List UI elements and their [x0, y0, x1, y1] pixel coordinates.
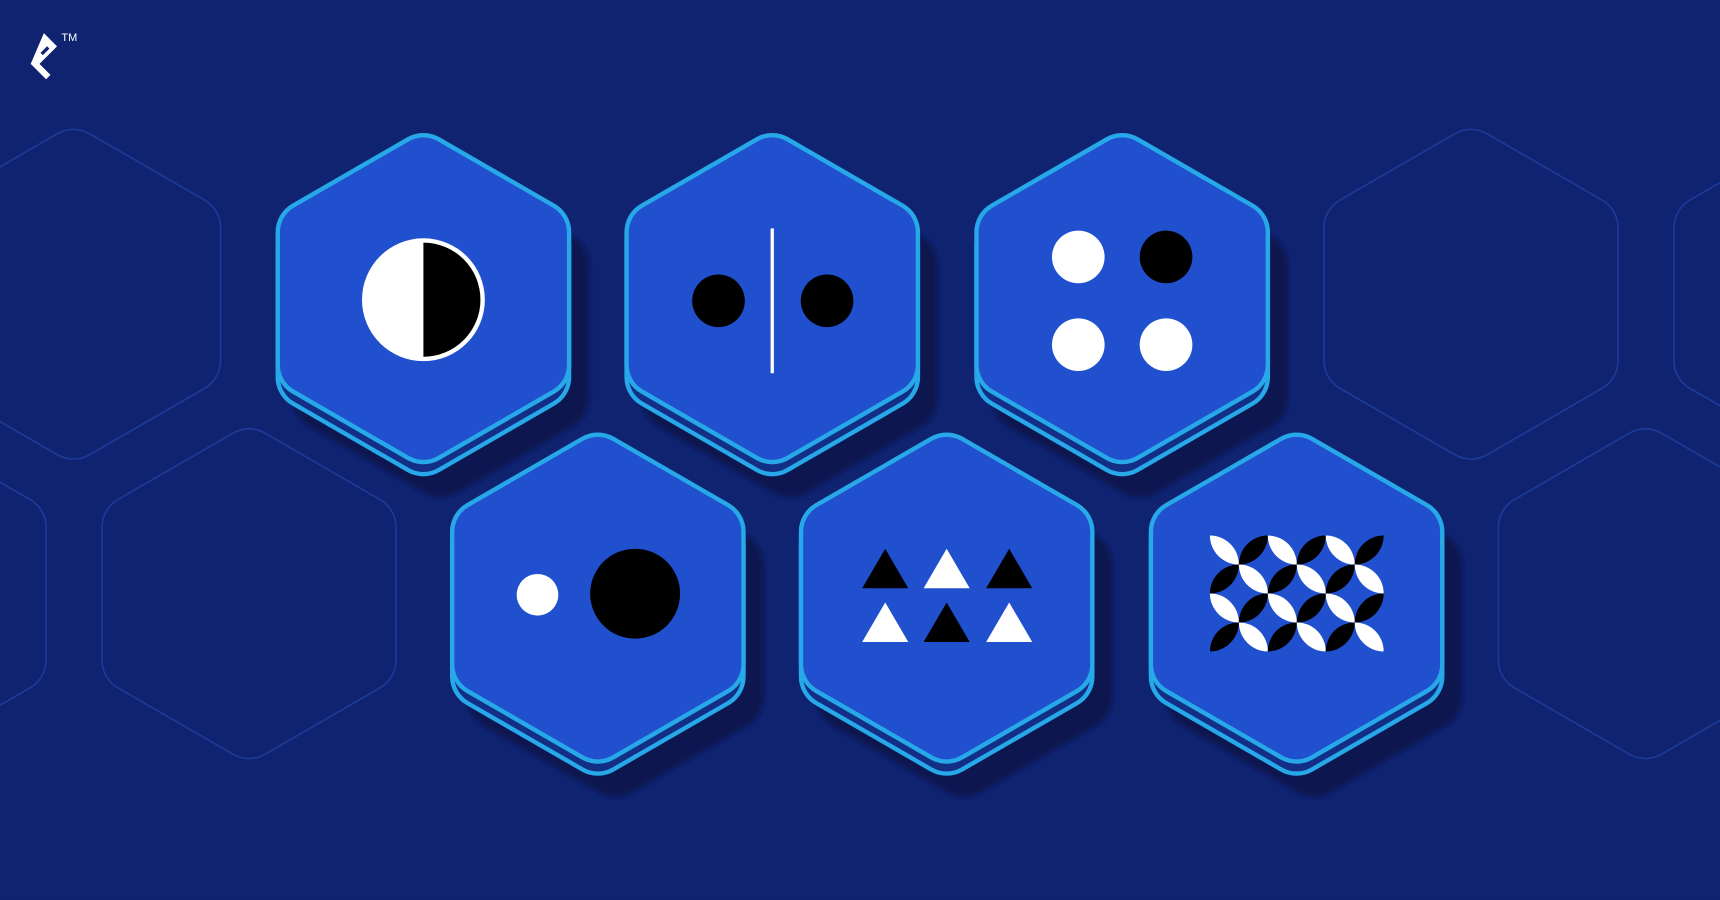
- hexagon tile: dots separated by line: [657, 166, 905, 464]
- icon: two dots and divider: [692, 228, 853, 373]
- hexagon tile: half circle contrast: [308, 166, 556, 464]
- logo: TM: [61, 32, 77, 44]
- hexagon tile: leaf pattern: [1182, 465, 1429, 764]
- hexagon tile: small and large circle: [483, 465, 730, 764]
- hexagon tile: triangles: [832, 465, 1079, 764]
- hexagon tile: four dots: [1007, 166, 1255, 464]
- icon: scale circles: [517, 549, 680, 639]
- icon: leaf pattern grid: [1210, 536, 1384, 651]
- logo: [31, 32, 77, 79]
- icon: half black half white circle: [362, 238, 485, 361]
- icon: four dots grid: [1052, 231, 1192, 371]
- icon: triangle grid: [862, 549, 1032, 642]
- background hexagon outlines: [0, 162, 1720, 726]
